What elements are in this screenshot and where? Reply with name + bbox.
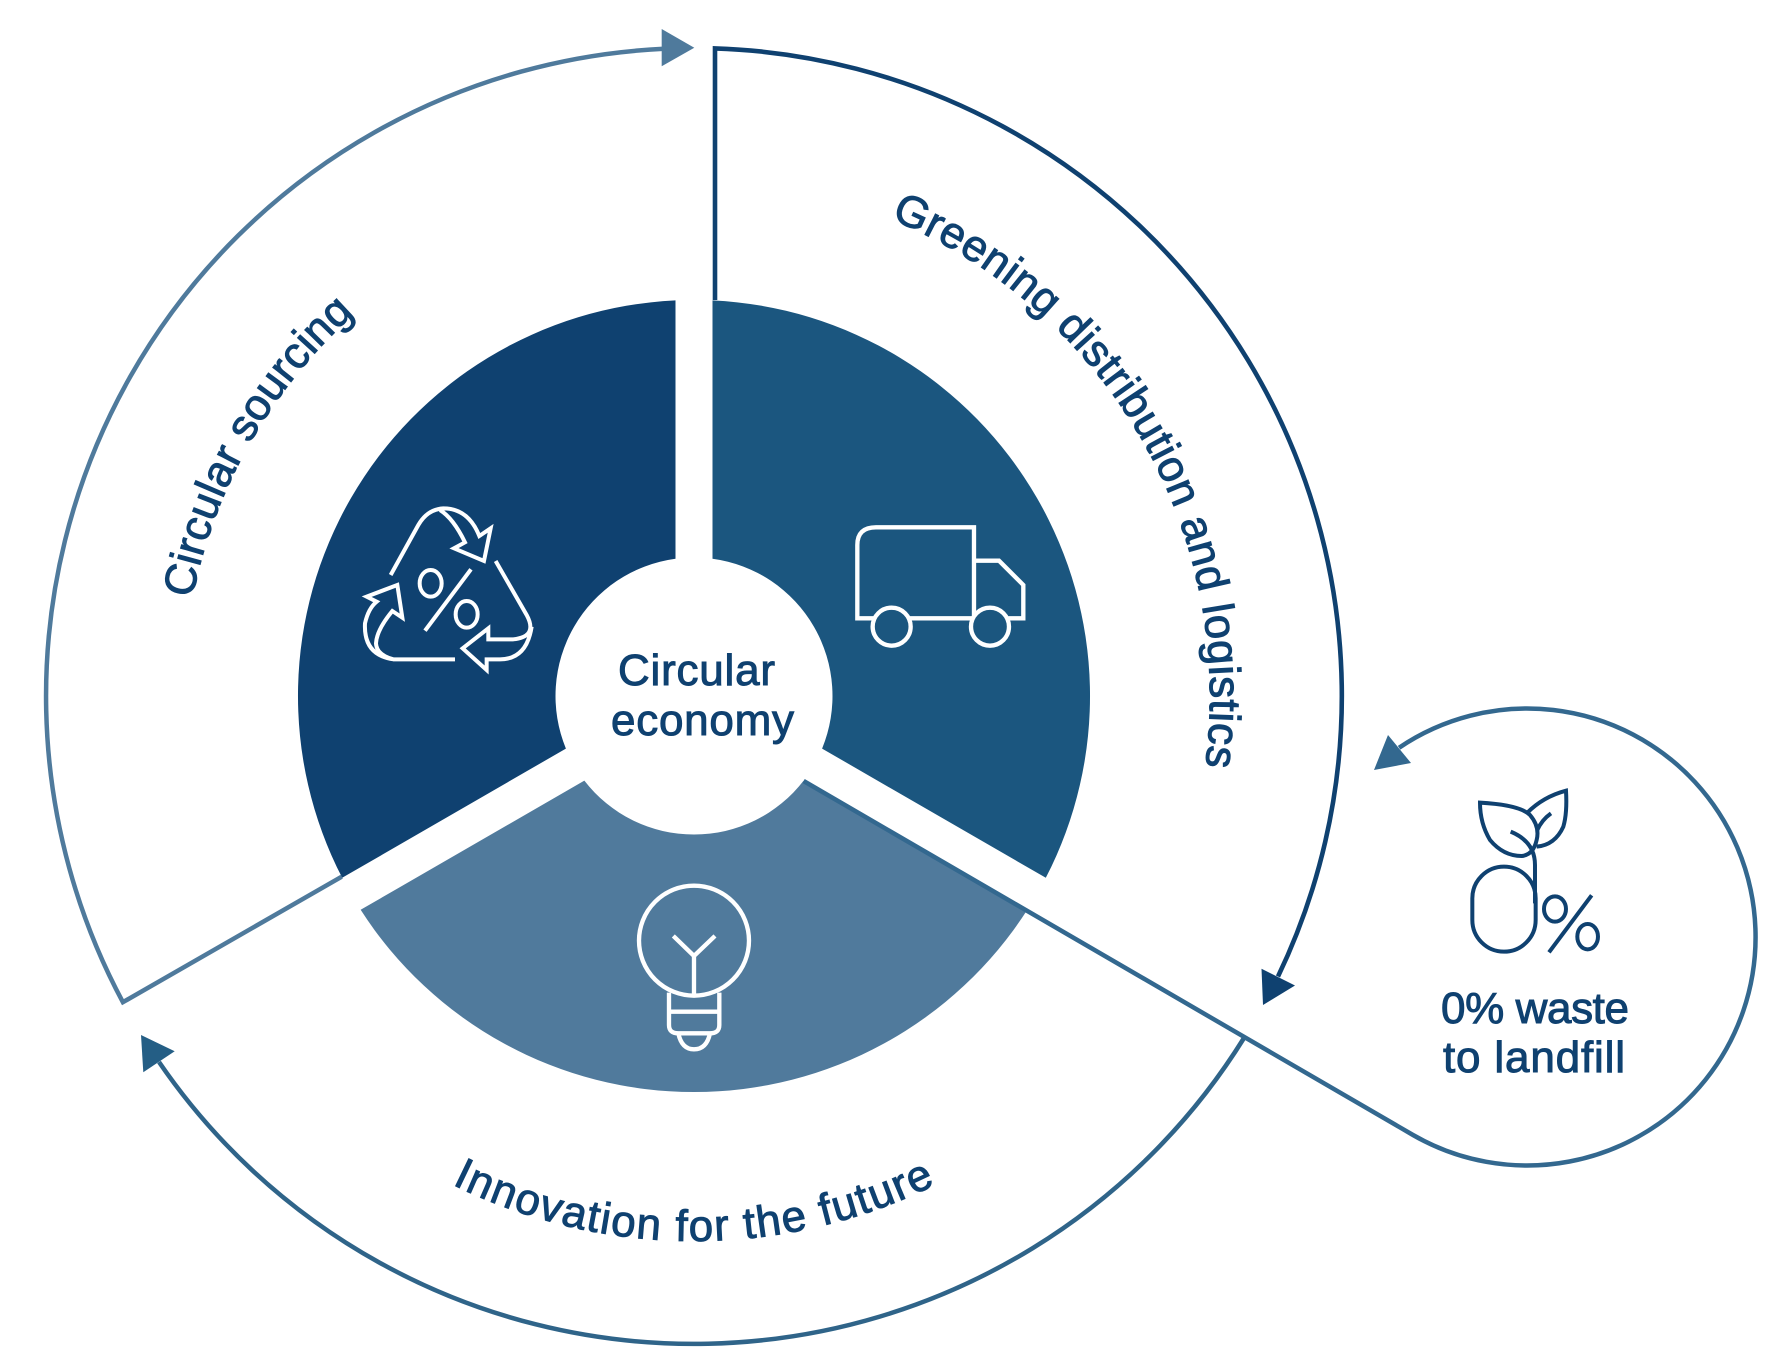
icon: recycling arrows with percent [365,508,532,670]
heading: circular economy [611,646,794,745]
label: innovation for the future: Innovation for the future [455,1158,932,1242]
icon: delivery truck [857,527,1023,646]
label: zero waste to landfill [1441,984,1629,1082]
icon: light bulb [639,886,749,1049]
heading: circular economy: economy [611,696,794,745]
label: zero waste to landfill: 0% waste [1441,984,1629,1033]
panel: circular sourcing wedge [298,300,676,878]
label: greening distribution and logistics: Greening distribution and logistics [896,196,1242,768]
arrow: zero waste loop [804,709,1756,1166]
arrow: circular sourcing outer ring [46,29,694,1002]
panel: innovation wedge [361,781,1027,1092]
heading: circular economy: Circular [618,646,775,695]
panel: greening distribution wedge [712,300,1090,878]
icon: plant with zero percent [1472,791,1598,952]
arrow: innovation outer ring [141,1035,1244,1344]
label: zero waste to landfill: to landfill [1443,1033,1625,1082]
label: circular sourcing: Circular sourcing [164,298,356,594]
arrow: greening distribution outer ring [715,48,1342,1005]
